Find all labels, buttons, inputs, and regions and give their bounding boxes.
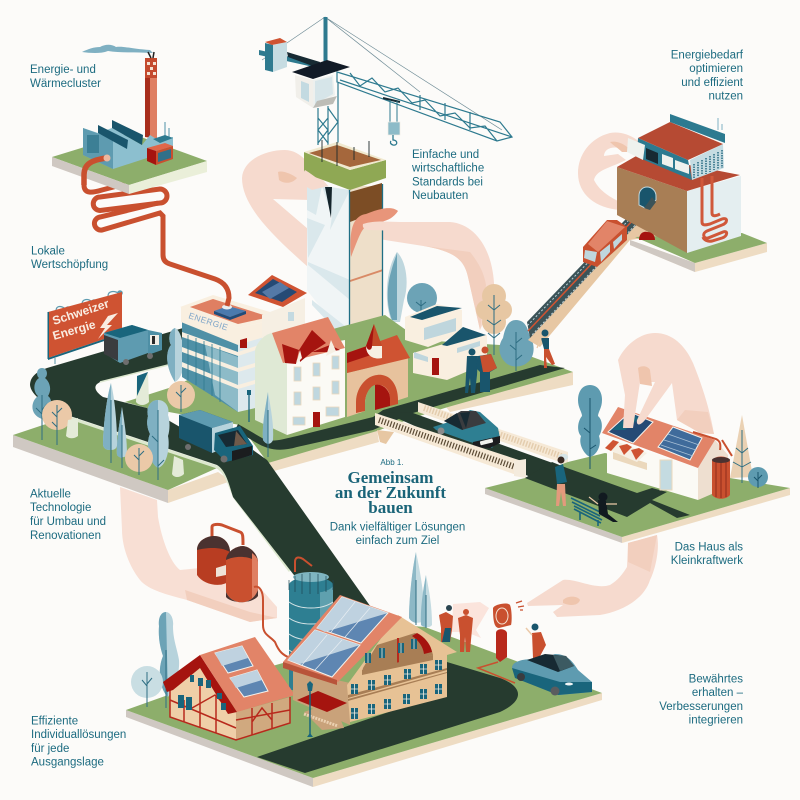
hand: right pointing at tower (362, 222, 494, 330)
label: Das Haus als Kleinkraftwerk: Das Haus als (675, 542, 743, 554)
label: Energiebedarf optimieren: optimieren (689, 63, 743, 75)
card in hand (627, 138, 645, 160)
hand: top left holding tower (242, 150, 330, 267)
half-timbered house (163, 637, 295, 740)
porch (297, 691, 347, 712)
office building: ENERGIE (180, 295, 290, 412)
round tree (131, 666, 163, 707)
townhouse door (313, 412, 320, 427)
label: Effiziente Individuallösungen: für jede (31, 743, 69, 755)
blob tree (147, 400, 170, 480)
funicular track over the viaduct in tunnel (644, 197, 656, 210)
label: Einfache und wirtschaftliche Standards: Standards bei (412, 176, 483, 188)
billboard: Schweizer Energie (48, 290, 123, 364)
bench (571, 498, 602, 526)
conifer (117, 407, 127, 468)
subtitle: Dank vielfältiger Lösungen (330, 522, 465, 534)
crane jib truss (337, 72, 512, 141)
bridge road and back rail (383, 402, 600, 490)
roof (283, 595, 402, 682)
label: Effiziente Individuallösungen: Effiziente (31, 716, 78, 728)
subtitle: einfach zum Ziel (356, 535, 439, 547)
hand over the roof (618, 333, 714, 434)
crane mast (318, 83, 338, 145)
tan cone tree (730, 415, 753, 483)
title: an der Zukunft (335, 483, 446, 502)
label: Bewährtes erhalten: Verbesserungen (659, 701, 743, 713)
walls (293, 670, 350, 725)
road (525, 462, 690, 518)
woman on bench (589, 492, 618, 522)
energy building island (583, 114, 767, 272)
funicular (527, 197, 657, 347)
heat pipes (702, 176, 727, 241)
silo (289, 557, 333, 690)
lamp and conifer by the townhouse (247, 390, 273, 457)
truck: upper road (104, 325, 162, 365)
billboard: Schweizer Energie: Energie (51, 317, 97, 343)
tower cut section (350, 183, 383, 356)
bridge front rail (375, 413, 526, 478)
house walls (607, 438, 698, 500)
title: bauen (368, 498, 413, 517)
car: charging (512, 654, 592, 696)
charging station (478, 604, 515, 683)
platform grass (13, 417, 217, 490)
label: Einfache und wirtschaftliche Standards: Neubauten (412, 190, 468, 202)
label: Energiebedarf optimieren: Energiebedarf (671, 50, 744, 62)
windows (178, 675, 226, 710)
tan tree (125, 444, 153, 475)
workers (439, 605, 473, 652)
label: Effiziente Individuallösungen: Ausgangslage (31, 756, 104, 768)
road (257, 662, 518, 773)
platform sides (13, 435, 168, 503)
label: Bewährtes erhalten: integrieren (689, 714, 743, 726)
funicular track (527, 197, 655, 338)
main platform (13, 315, 573, 640)
conifers behind the chalet (409, 552, 432, 628)
hand under main platform holding tanks (120, 487, 277, 622)
tower top deck (304, 140, 386, 190)
townhouse windows (293, 356, 339, 425)
finger tips and curl on tower (298, 170, 400, 257)
rooftop unit (214, 304, 246, 320)
sparks (516, 601, 524, 610)
tan tree near office (167, 381, 195, 412)
bottom platform (126, 620, 602, 787)
background trees behind modern house (387, 252, 437, 322)
title: Gemeinsam (348, 468, 433, 487)
house with solar roof behind office (248, 275, 307, 345)
factory island (52, 45, 207, 210)
label: Einfache und wirtschaftliche Standards: wirtschaftliche (411, 162, 484, 174)
label: Effiziente Individuallösungen: Individuallösungen (31, 729, 126, 741)
crane hook (383, 98, 400, 145)
pipe from factory into the office (94, 203, 229, 306)
trees: left of main platform (32, 328, 195, 480)
tower: under construction (304, 140, 386, 356)
label: Aktuelle Technologie: für Umbau und (30, 516, 106, 528)
roof (602, 407, 715, 468)
tan tree left (42, 400, 72, 445)
label: Das Haus als Kleinkraftwerk: Kleinkraftwerk (671, 555, 743, 567)
person walking (537, 330, 555, 368)
label: Energie- und Wärmecluster: Wärmecluster (30, 78, 101, 90)
pillar (66, 418, 78, 438)
hand: top right holding card (578, 133, 640, 210)
funicular viaduct (528, 205, 657, 347)
factory hall (83, 120, 173, 169)
white townhouse (240, 317, 345, 435)
tree teal blob far left (32, 368, 51, 440)
label: Energiebedarf optimieren: und effizient (681, 77, 744, 89)
crane cab (292, 60, 350, 108)
blob tree near office (167, 328, 184, 382)
pipe out of the factory (84, 154, 110, 185)
billboard: Schweizer Energie: Schweizer (51, 296, 111, 328)
coil (93, 189, 167, 210)
train (583, 220, 627, 267)
conifer (421, 575, 432, 628)
tower glass facade (307, 183, 350, 345)
crane (259, 17, 512, 145)
tall tree (159, 612, 179, 708)
gate house with arch (347, 324, 410, 417)
crane counter jib (259, 38, 320, 72)
car on the bridge (433, 410, 500, 448)
label: Energie- und Wärmecluster: Energie- und (30, 64, 96, 76)
smoke (82, 45, 153, 53)
rooftop unit (637, 114, 725, 180)
label: Bewährtes erhalten: Bewährtes (689, 674, 743, 686)
people beside the modern house (465, 330, 555, 393)
hand pointing under the island (527, 535, 658, 617)
tanks (197, 524, 290, 658)
trees: right of main platform (476, 284, 534, 371)
label: Energiebedarf optimieren: nutzen (708, 90, 743, 102)
road (67, 417, 290, 571)
label: Aktuelle Technologie: Aktuelle (30, 488, 71, 500)
red box (147, 143, 173, 165)
label: Aktuelle Technologie: Technologie (30, 502, 91, 514)
teal tree (499, 320, 534, 371)
people and charging station (439, 601, 546, 683)
tunnel (639, 187, 656, 208)
island: house as a small power plant (485, 333, 790, 617)
tan tree (476, 284, 512, 355)
label: Bewährtes erhalten: erhalten – (692, 687, 744, 699)
windows (351, 639, 442, 719)
small tree (748, 467, 768, 488)
window and awning (613, 452, 647, 470)
label: Lokale Wertschöpfung: Lokale (31, 246, 65, 258)
gate house turret (366, 324, 382, 358)
man (555, 454, 568, 506)
building walls (617, 167, 687, 253)
office building: ENERGIE: ENERGIE (187, 310, 230, 333)
figure number: Abb 1. (380, 458, 404, 467)
trees left of half-timbered house (131, 612, 179, 708)
person right (476, 346, 497, 392)
timber (170, 680, 290, 740)
tank with pipe (693, 432, 732, 499)
label: Einfache und wirtschaftliche Standards: Einfache und (412, 149, 479, 161)
pipe behind platform (84, 184, 125, 192)
truck: lower road (179, 410, 253, 462)
street lamp (307, 681, 313, 737)
label: Aktuelle Technologie: Renovationen (30, 530, 101, 542)
chimney (145, 52, 157, 140)
label: Lokale Wertschöpfung: Wertschöpfung (31, 259, 108, 271)
woman (526, 624, 546, 658)
chalet (283, 595, 457, 737)
modern house (405, 304, 487, 380)
conifer (409, 552, 425, 625)
teal tree (578, 385, 602, 469)
conifer (103, 383, 117, 463)
person left (465, 348, 478, 393)
